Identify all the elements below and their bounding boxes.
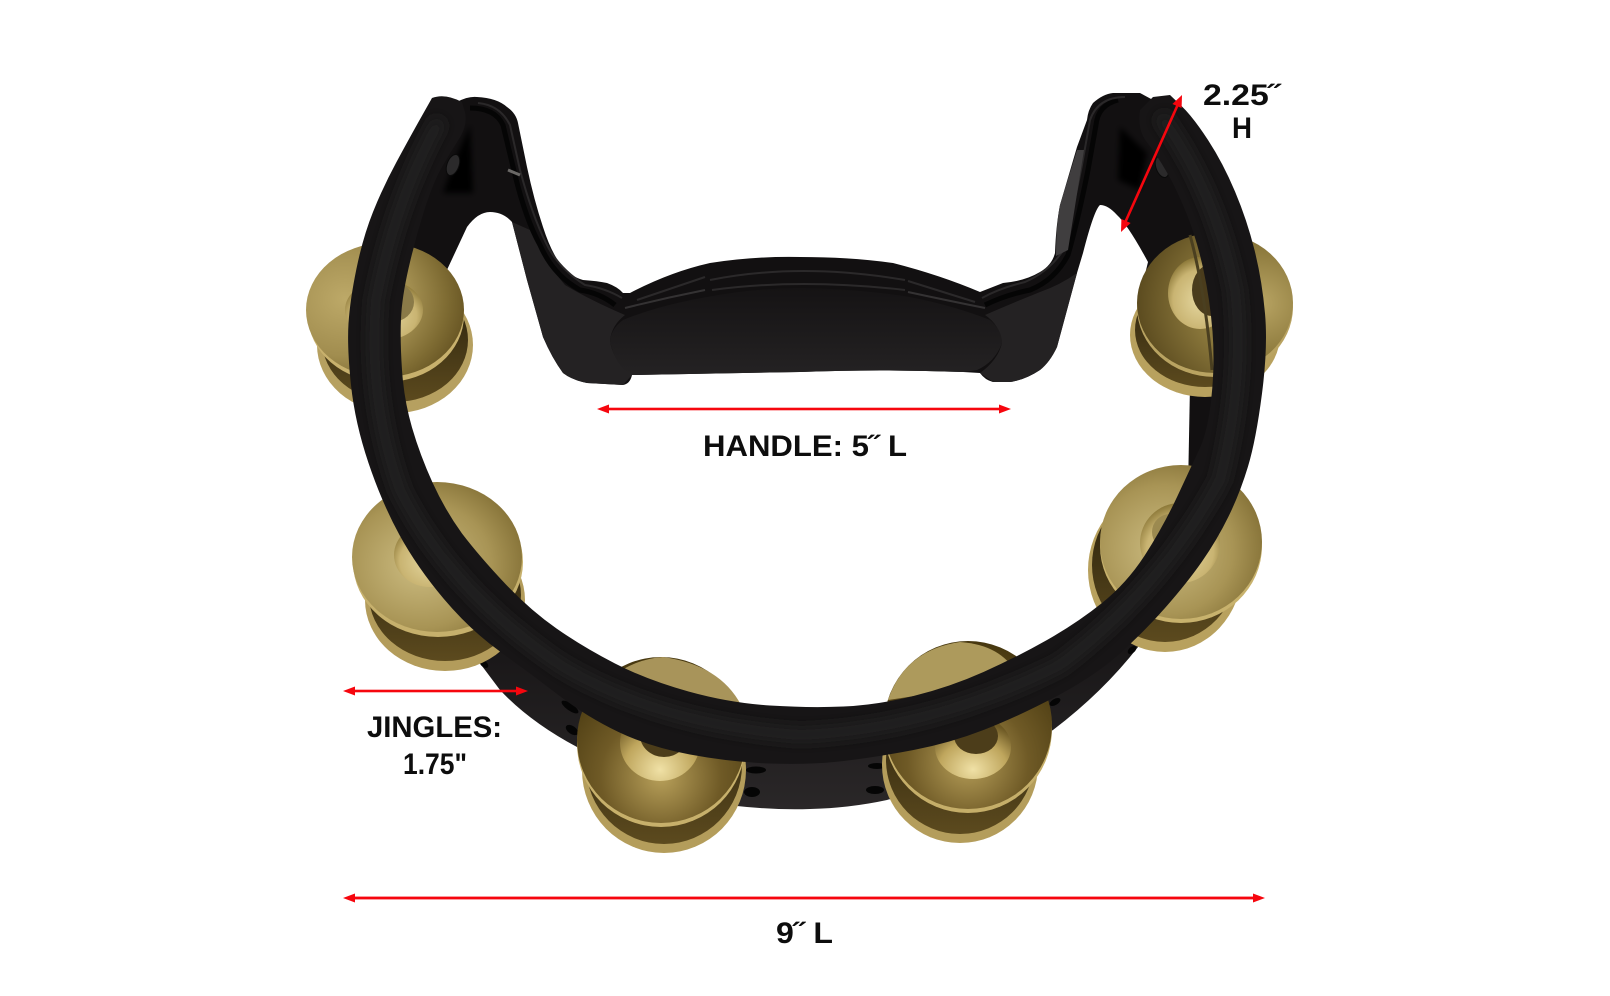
label: 1.75 inch: 1.75"	[403, 748, 467, 781]
dimension: handle length	[597, 404, 1011, 463]
grip pad	[610, 288, 1002, 375]
label: handle: HANDLE: 5˝ L	[703, 430, 907, 463]
dimension: overall length	[343, 894, 1265, 950]
arrow: handle	[597, 404, 1011, 414]
top strap ridges	[637, 271, 975, 302]
jingle: top right	[1130, 233, 1293, 397]
rubber ring	[348, 95, 1266, 764]
jingle: top left	[306, 243, 473, 413]
label: jingles: JINGLES:	[367, 711, 502, 744]
arrow: 2.25 inch height	[1121, 95, 1182, 232]
handle lip right	[985, 100, 1118, 305]
dark recess right	[1118, 127, 1147, 190]
dark recess left	[443, 125, 473, 193]
infographic: tambourine dimensions	[306, 84, 1293, 944]
dimension: overall height	[1121, 79, 1282, 232]
label: H: H	[1232, 112, 1252, 145]
right frame sheen	[1056, 150, 1084, 256]
jingle: middle left	[352, 482, 525, 671]
label: 9 inch: 9˝ L	[776, 917, 833, 950]
left front face	[512, 222, 632, 385]
arrow: jingles	[343, 686, 528, 696]
screw right	[1153, 155, 1171, 179]
dimension: jingle diameter	[343, 686, 528, 781]
tambourine	[306, 93, 1293, 853]
handle and frame	[400, 93, 1205, 385]
jingle: bottom left	[577, 657, 746, 853]
handle silhouette	[400, 93, 1205, 385]
lower frame band with holes	[470, 385, 1216, 809]
handle lip left	[470, 108, 615, 305]
jingle: middle right	[1088, 465, 1262, 652]
label: 2.25 inch: 2.25˝	[1203, 79, 1282, 112]
jingle: bottom right	[882, 641, 1052, 843]
arrow: overall length	[343, 894, 1265, 902]
right front face	[980, 273, 1077, 382]
screw left	[444, 153, 462, 177]
